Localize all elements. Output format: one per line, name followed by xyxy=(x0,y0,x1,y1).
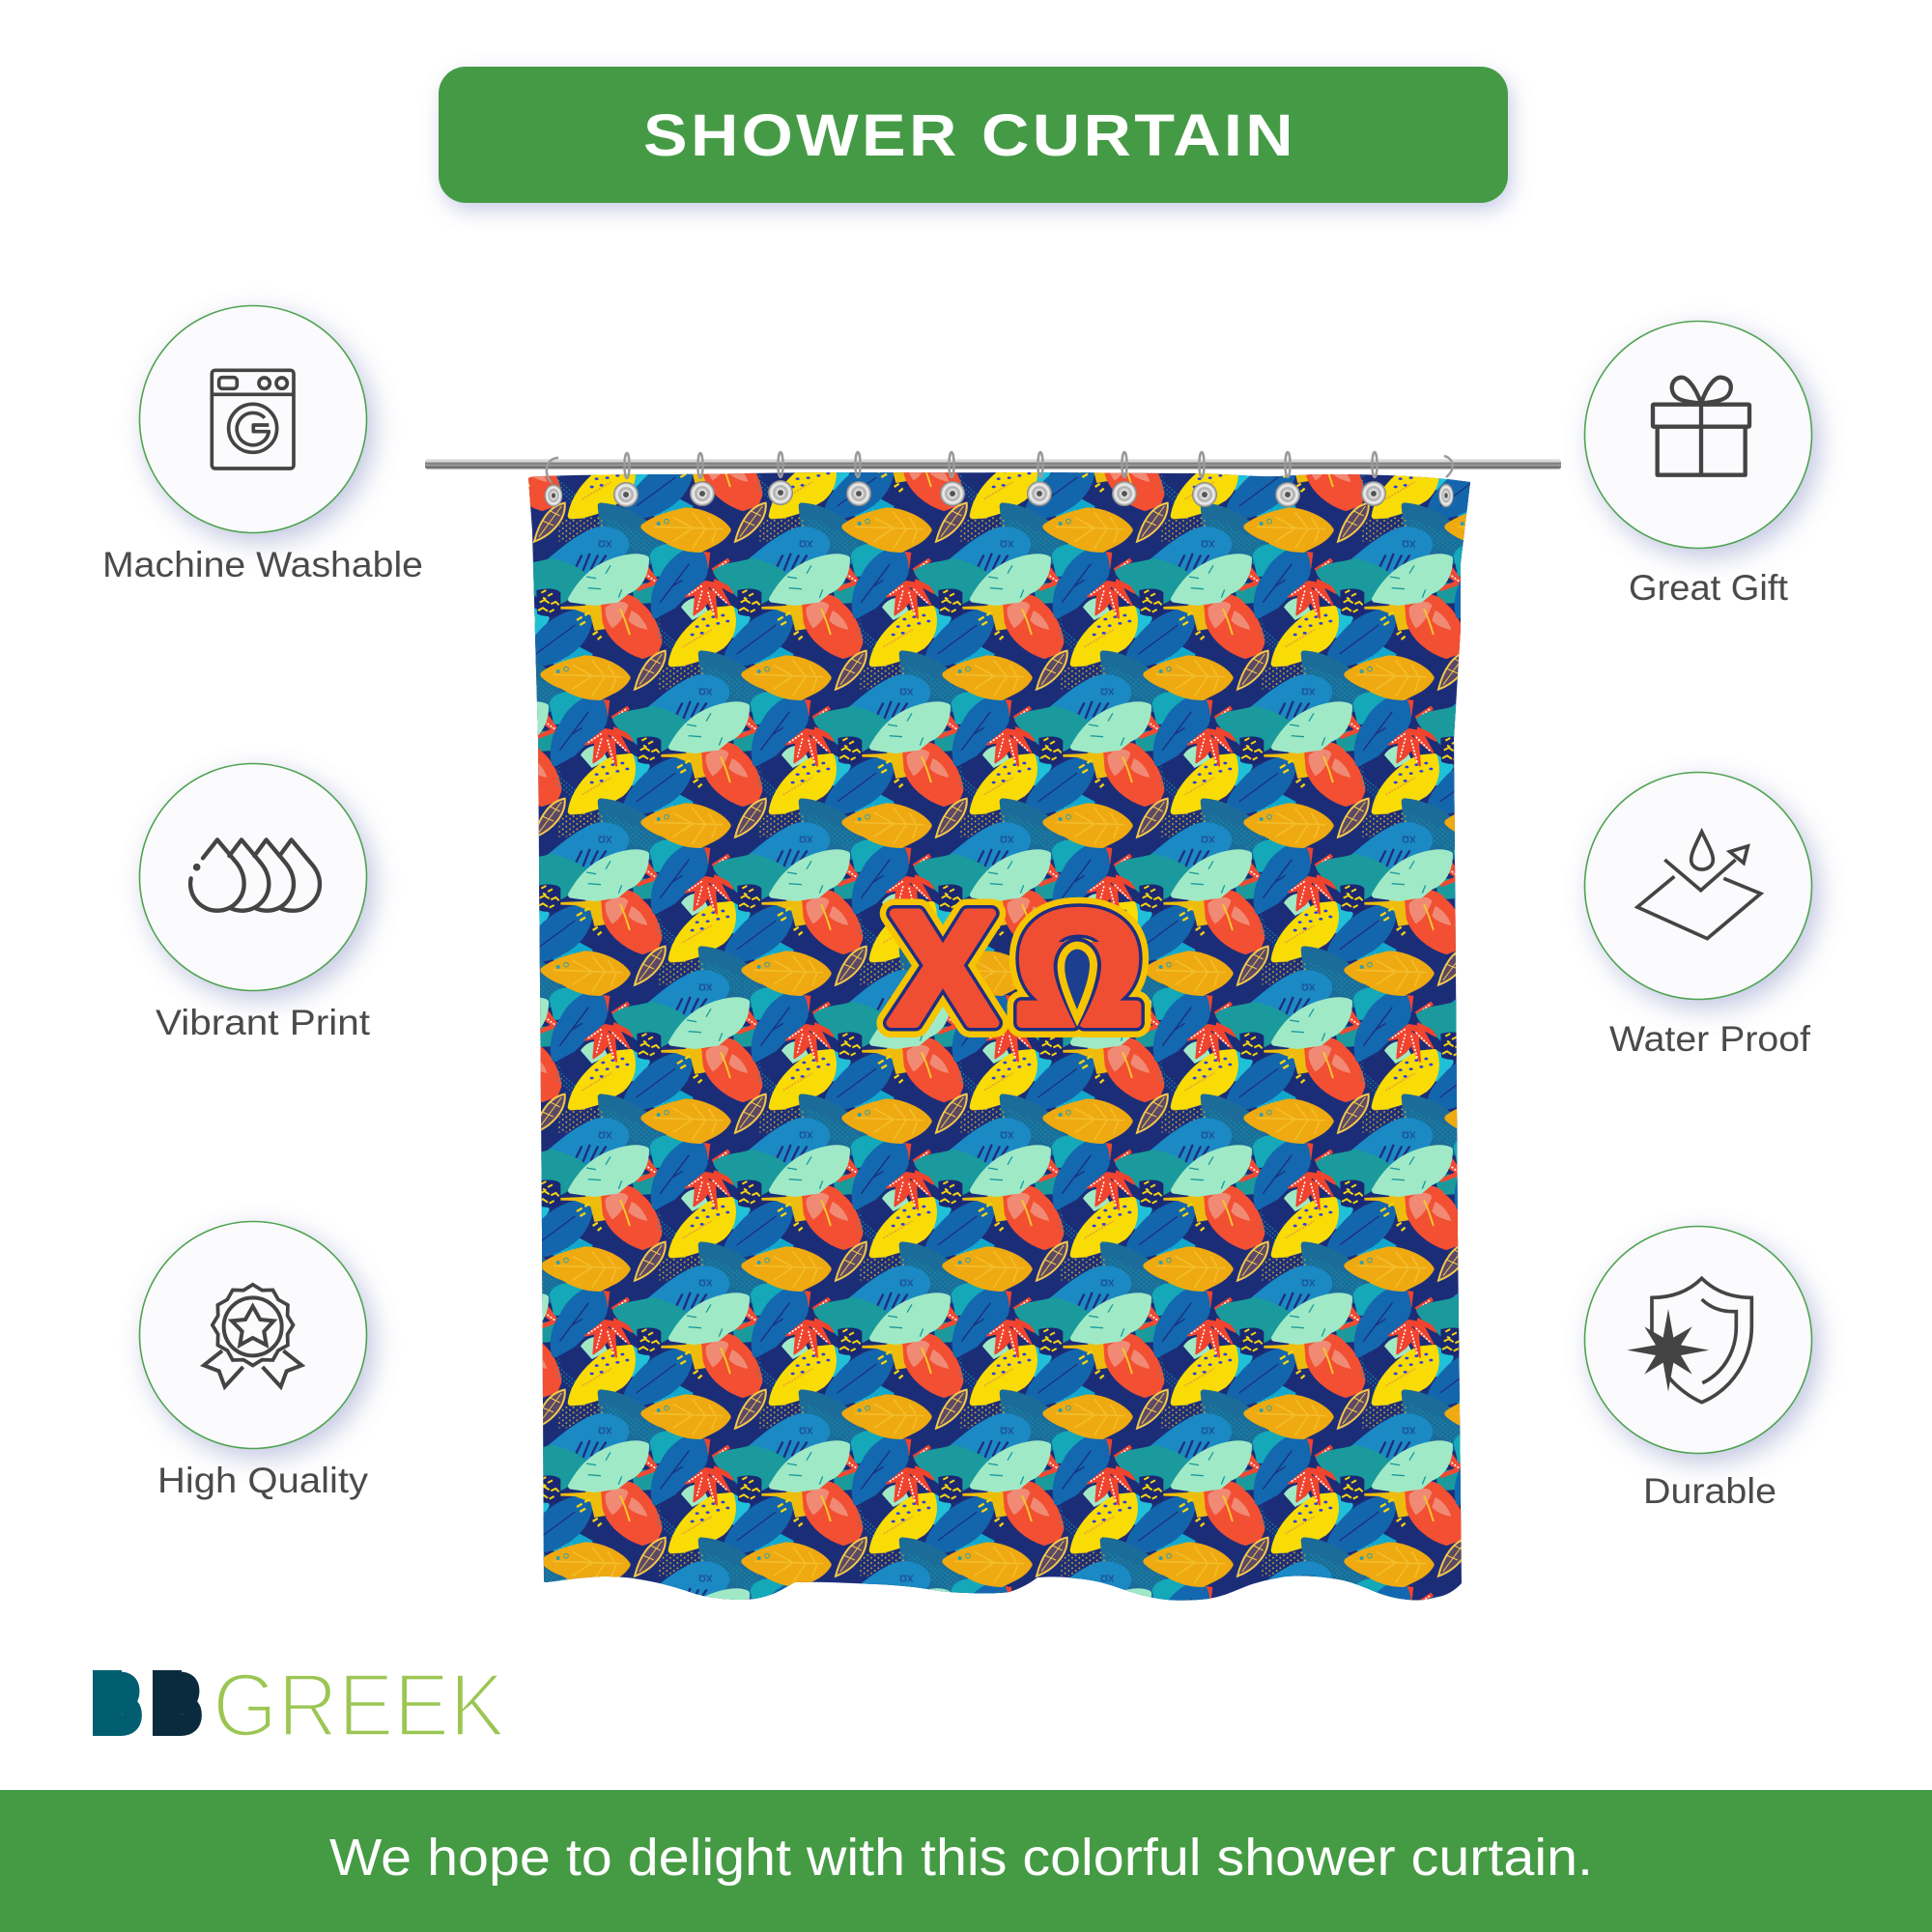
logo: BB GREEK: B xyxy=(97,1663,139,1746)
curtain grommets xyxy=(545,481,1453,507)
feature: Water Proof: Water Proof xyxy=(1609,1019,1811,1059)
title banner xyxy=(439,67,1508,203)
curtain xyxy=(528,450,1470,1601)
icon: shield with star xyxy=(1627,1278,1751,1403)
omega inner teardrop xyxy=(1040,938,1116,1030)
feature: Vibrant Print xyxy=(139,763,371,1042)
logo: BB GREEK: GREEK xyxy=(213,1655,505,1755)
feature: Machine Washable: Machine Washable xyxy=(102,545,423,584)
center letters emblem: Χ xyxy=(890,879,996,1057)
curtain hooks xyxy=(547,452,1453,483)
icon: washing machine xyxy=(212,370,294,469)
center letters emblem: Χ xyxy=(890,879,996,1057)
feature: Durable: Durable xyxy=(1643,1471,1776,1511)
feature: Machine Washable xyxy=(102,305,423,584)
footer band: We hope to delight with this colorful shower curtain. xyxy=(329,1829,1593,1887)
icon: award badge xyxy=(204,1285,301,1387)
center letters emblem: Χ xyxy=(890,879,996,1057)
logo: BB GREEK: B xyxy=(156,1663,199,1746)
icon: color drops xyxy=(190,839,320,911)
logo: BB GREEK xyxy=(93,1655,505,1755)
title banner: SHOWER CURTAIN xyxy=(643,102,1296,168)
center letters emblem: Ω xyxy=(1015,879,1143,1057)
center letters emblem: Ω xyxy=(1015,879,1143,1057)
center letters emblem xyxy=(890,879,1143,1057)
feature: Durable xyxy=(1584,1227,1812,1511)
feature: Great Gift xyxy=(1584,321,1812,608)
feature: Vibrant Print: Vibrant Print xyxy=(156,1003,371,1042)
feature: Water Proof xyxy=(1584,773,1812,1059)
shower rod xyxy=(425,459,1561,469)
feature: High Quality: High Quality xyxy=(157,1461,369,1500)
feature: High Quality xyxy=(139,1221,369,1500)
center letters emblem: Ω xyxy=(1015,879,1143,1057)
footer band xyxy=(0,1790,1932,1932)
icon: gift box xyxy=(1653,378,1749,475)
feature: Great Gift: Great Gift xyxy=(1629,568,1789,608)
icon: water repellent sheet xyxy=(1637,832,1761,939)
